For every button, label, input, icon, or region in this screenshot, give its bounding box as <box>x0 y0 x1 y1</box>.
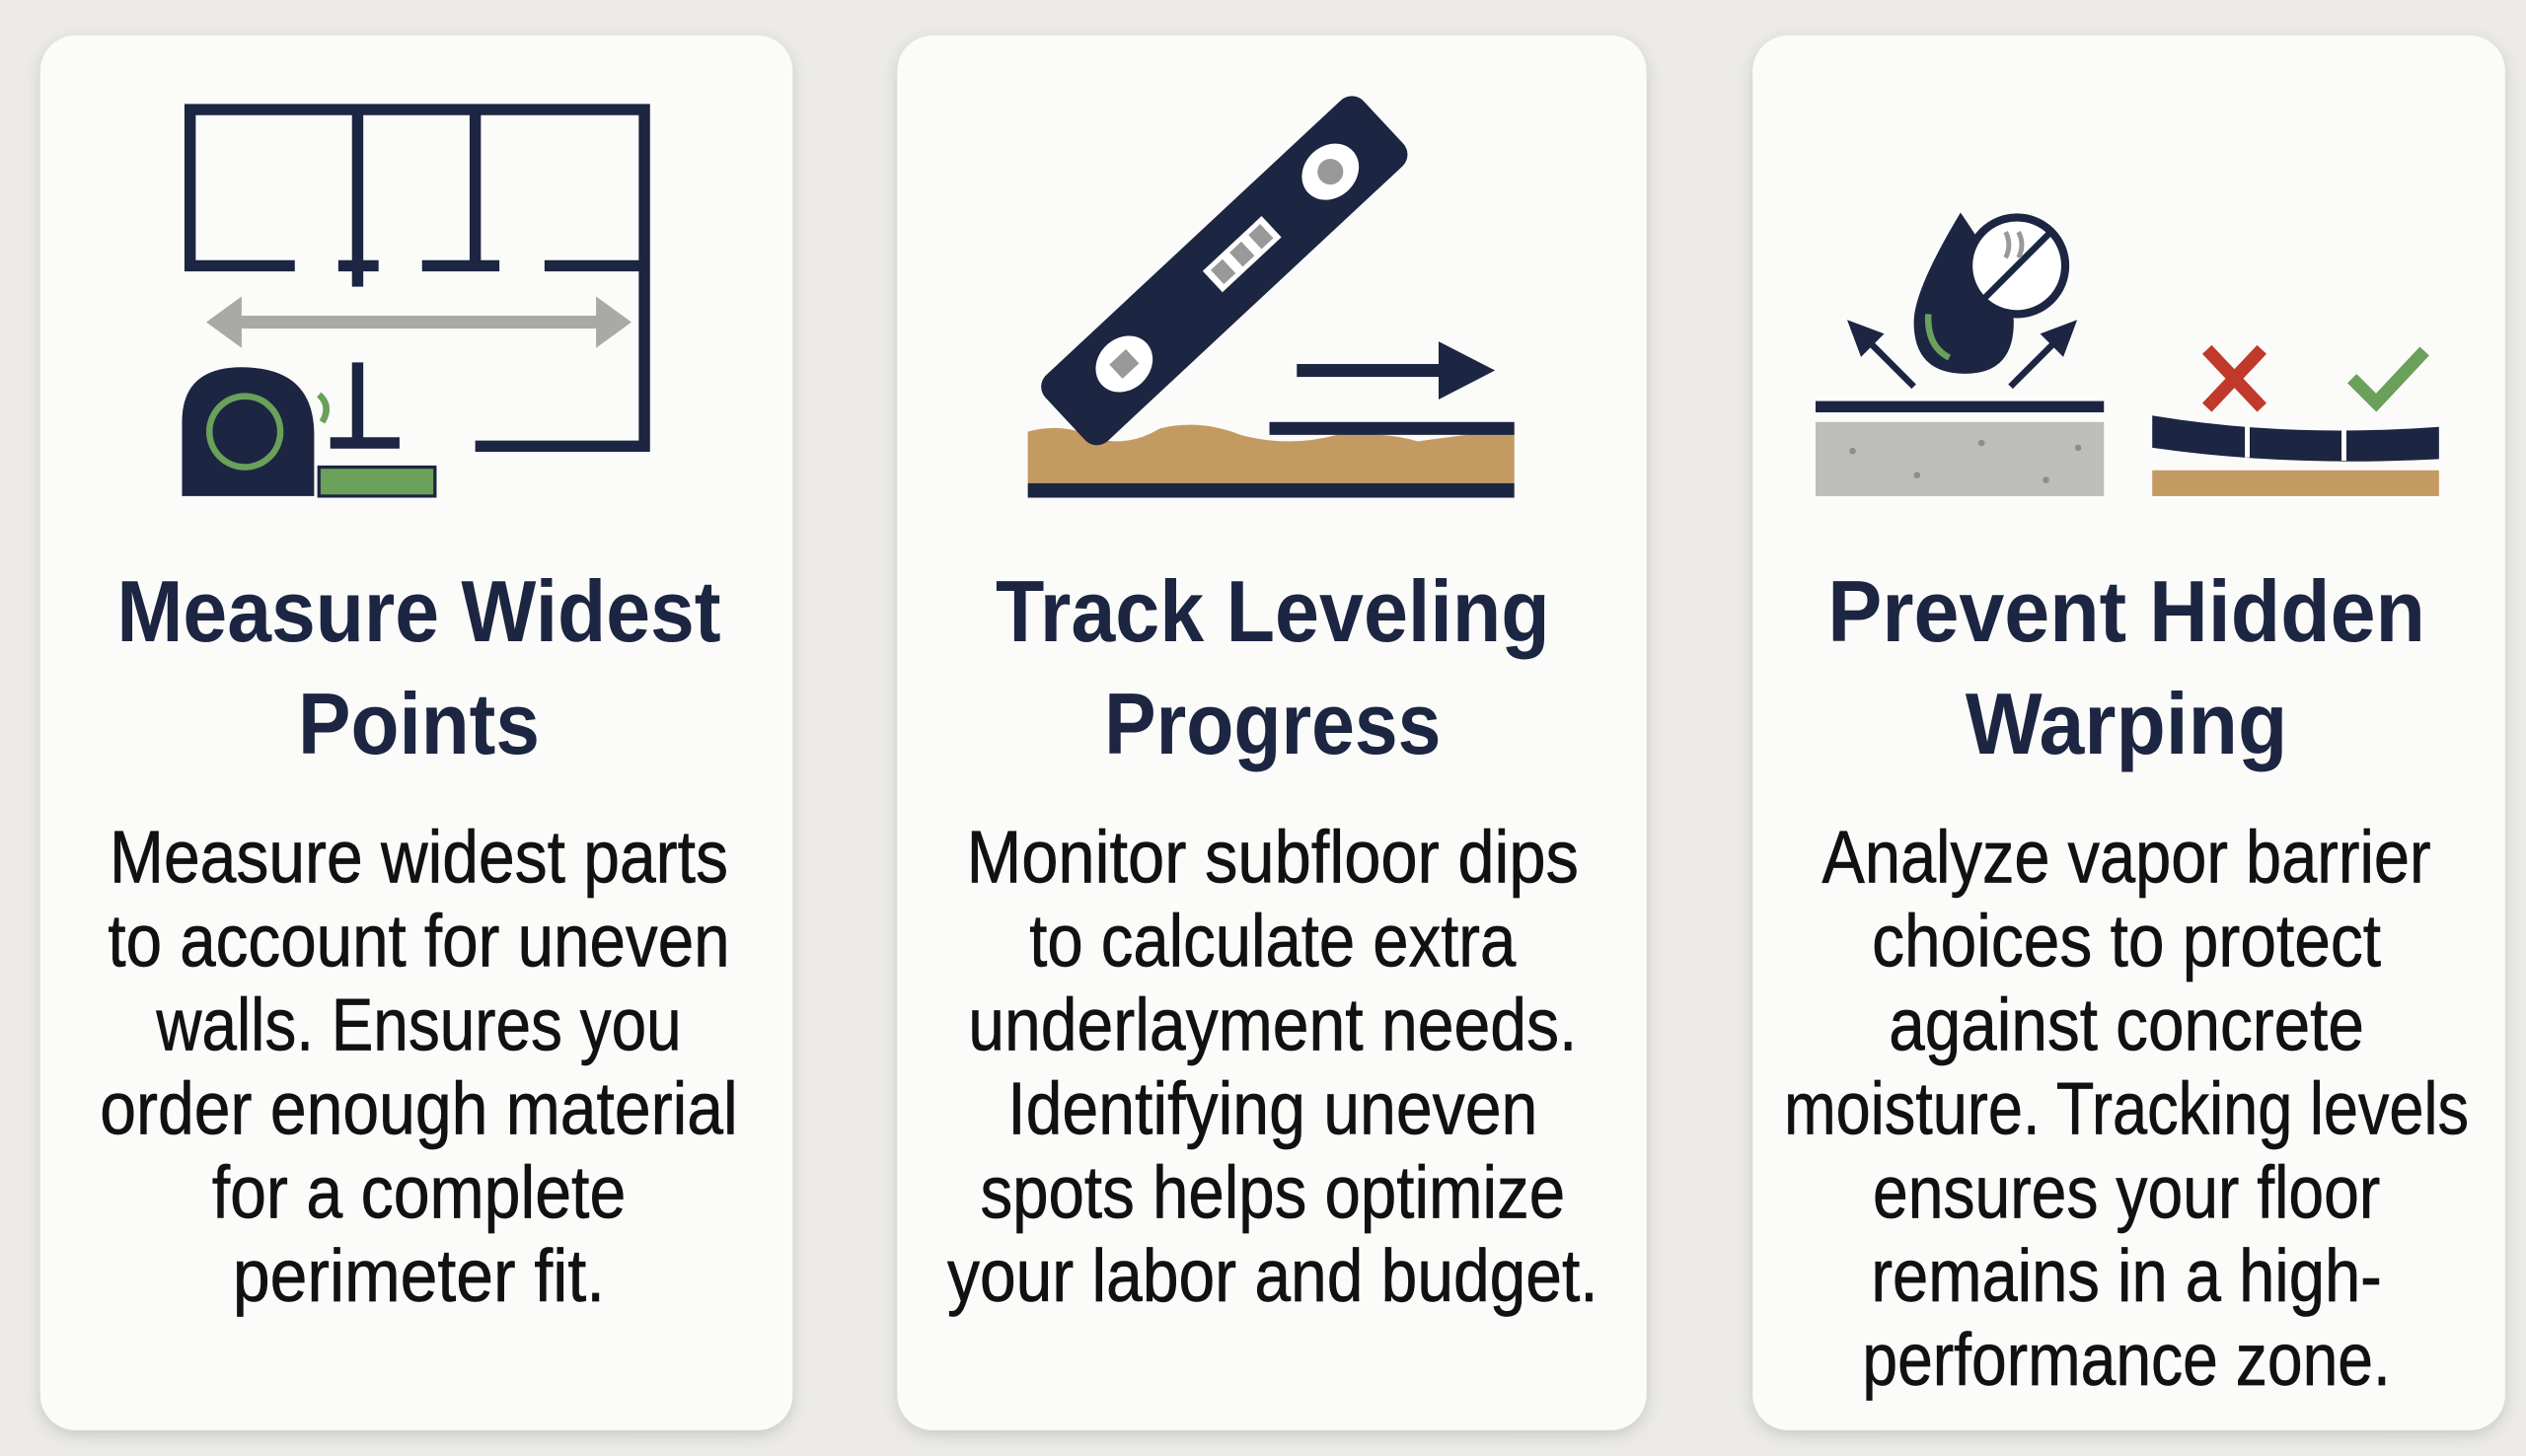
text: measure body <box>100 816 738 1317</box>
panel: warping <box>1752 36 2505 1430</box>
text: leveling body: underlayment needs. <box>968 983 1577 1066</box>
heading: leveling: Progress <box>1104 675 1441 772</box>
icon: floor plan with tape measure <box>182 109 644 496</box>
heading: warping: Prevent Hidden <box>1827 562 2425 660</box>
heading: warping <box>1827 562 2425 772</box>
text: measure body: order enough material <box>100 1066 738 1149</box>
heading: leveling <box>996 562 1550 772</box>
text: leveling body: Identifying uneven <box>1007 1066 1537 1149</box>
icon: spirit level on subfloor <box>1028 90 1515 498</box>
text: measure body: Measure widest parts <box>110 816 728 899</box>
text: measure body: walls. Ensures you <box>156 983 682 1066</box>
text: warping body: Analyze vapor barrier <box>1822 816 2431 899</box>
icon: vapor barrier and boards <box>1816 213 2439 496</box>
text: warping body <box>1784 816 2469 1401</box>
panel: leveling <box>897 36 1647 1430</box>
text: warping body: against concrete <box>1889 983 2364 1066</box>
heading: measure: Measure Widest <box>116 562 721 660</box>
text: measure body: for a complete <box>212 1150 626 1233</box>
text: leveling body: spots helps optimize <box>980 1150 1565 1233</box>
heading: warping: Warping <box>1966 675 2287 772</box>
text: warping body: performance zone. <box>1862 1318 2391 1401</box>
text: leveling body: to calculate extra <box>1029 900 1517 983</box>
text: leveling body <box>947 816 1598 1317</box>
text: warping body: remains in a high- <box>1871 1234 2382 1317</box>
text: leveling body: Monitor subfloor dips <box>967 816 1579 899</box>
heading: measure <box>116 562 721 772</box>
text: leveling body: your labor and budget. <box>947 1234 1598 1317</box>
text: measure body: perimeter fit. <box>233 1234 605 1317</box>
text: warping body: ensures your floor <box>1873 1150 2380 1233</box>
text: measure body: to account for uneven <box>108 900 730 983</box>
heading: measure: Points <box>298 675 540 772</box>
text: warping body: choices to protect <box>1872 900 2381 983</box>
heading: leveling: Track Leveling <box>996 562 1550 660</box>
panel: measure <box>40 36 792 1430</box>
